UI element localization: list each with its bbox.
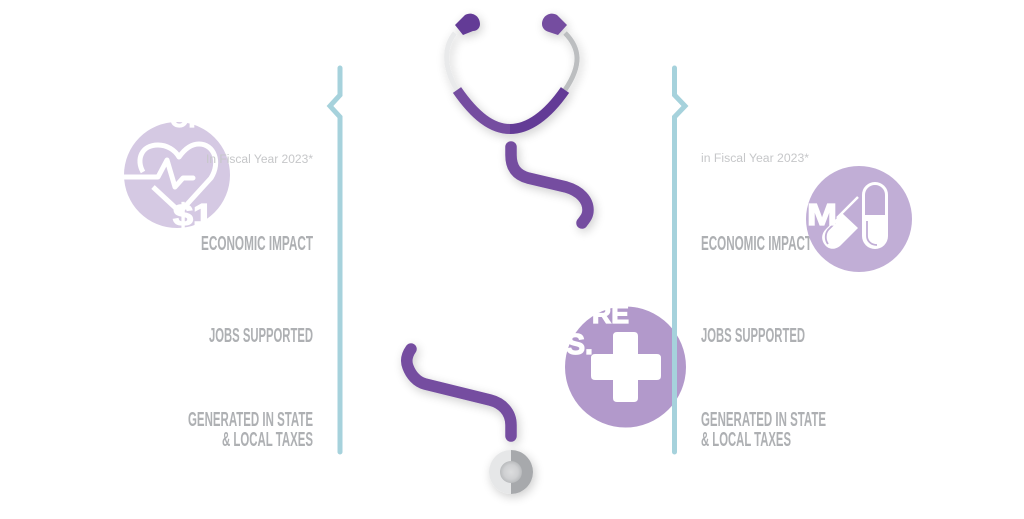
hidden white figure: M	[807, 197, 837, 232]
label: economic impact: ECONOMIC IMPACT	[701, 232, 812, 255]
icon: heart circle	[124, 122, 230, 228]
label: fiscal year note: in Fiscal Year 2023*	[701, 153, 810, 165]
hidden white word fragment: RE	[592, 299, 629, 329]
hidden white heading: OF	[170, 106, 203, 133]
right divider with chevron	[674, 68, 685, 452]
panel: right column	[674, 68, 912, 452]
upper tube	[511, 147, 588, 223]
label: generated in state and local taxes	[188, 408, 313, 451]
label: generated in state and local taxes: & LOCAL TAXES	[222, 428, 313, 451]
label: jobs supported: JOBS SUPPORTED	[701, 324, 805, 347]
label: generated in state and local taxes	[701, 408, 826, 451]
chest piece	[489, 450, 533, 494]
lower tube	[407, 349, 511, 436]
panel: plus icon	[565, 306, 686, 428]
left divider with chevron	[330, 68, 340, 452]
label: economic impact: ECONOMIC IMPACT	[201, 232, 313, 255]
label: jobs supported: JOBS SUPPORTED	[209, 324, 313, 347]
headset tubes	[447, 14, 577, 129]
panel: left column	[124, 68, 340, 452]
fiscal year note: In Fiscal Year 2023*	[206, 154, 314, 166]
icon: pill circle	[806, 166, 912, 272]
hidden white figure: $1	[173, 197, 213, 232]
label: generated in state and local taxes: GENERATED IN STATE	[701, 408, 826, 431]
hidden white word fragment: S.	[566, 329, 593, 361]
label: generated in state and local taxes: & LOCAL TAXES	[701, 428, 791, 451]
label: generated in state and local taxes: GENERATED IN STATE	[188, 408, 313, 431]
stethoscope	[407, 14, 588, 494]
